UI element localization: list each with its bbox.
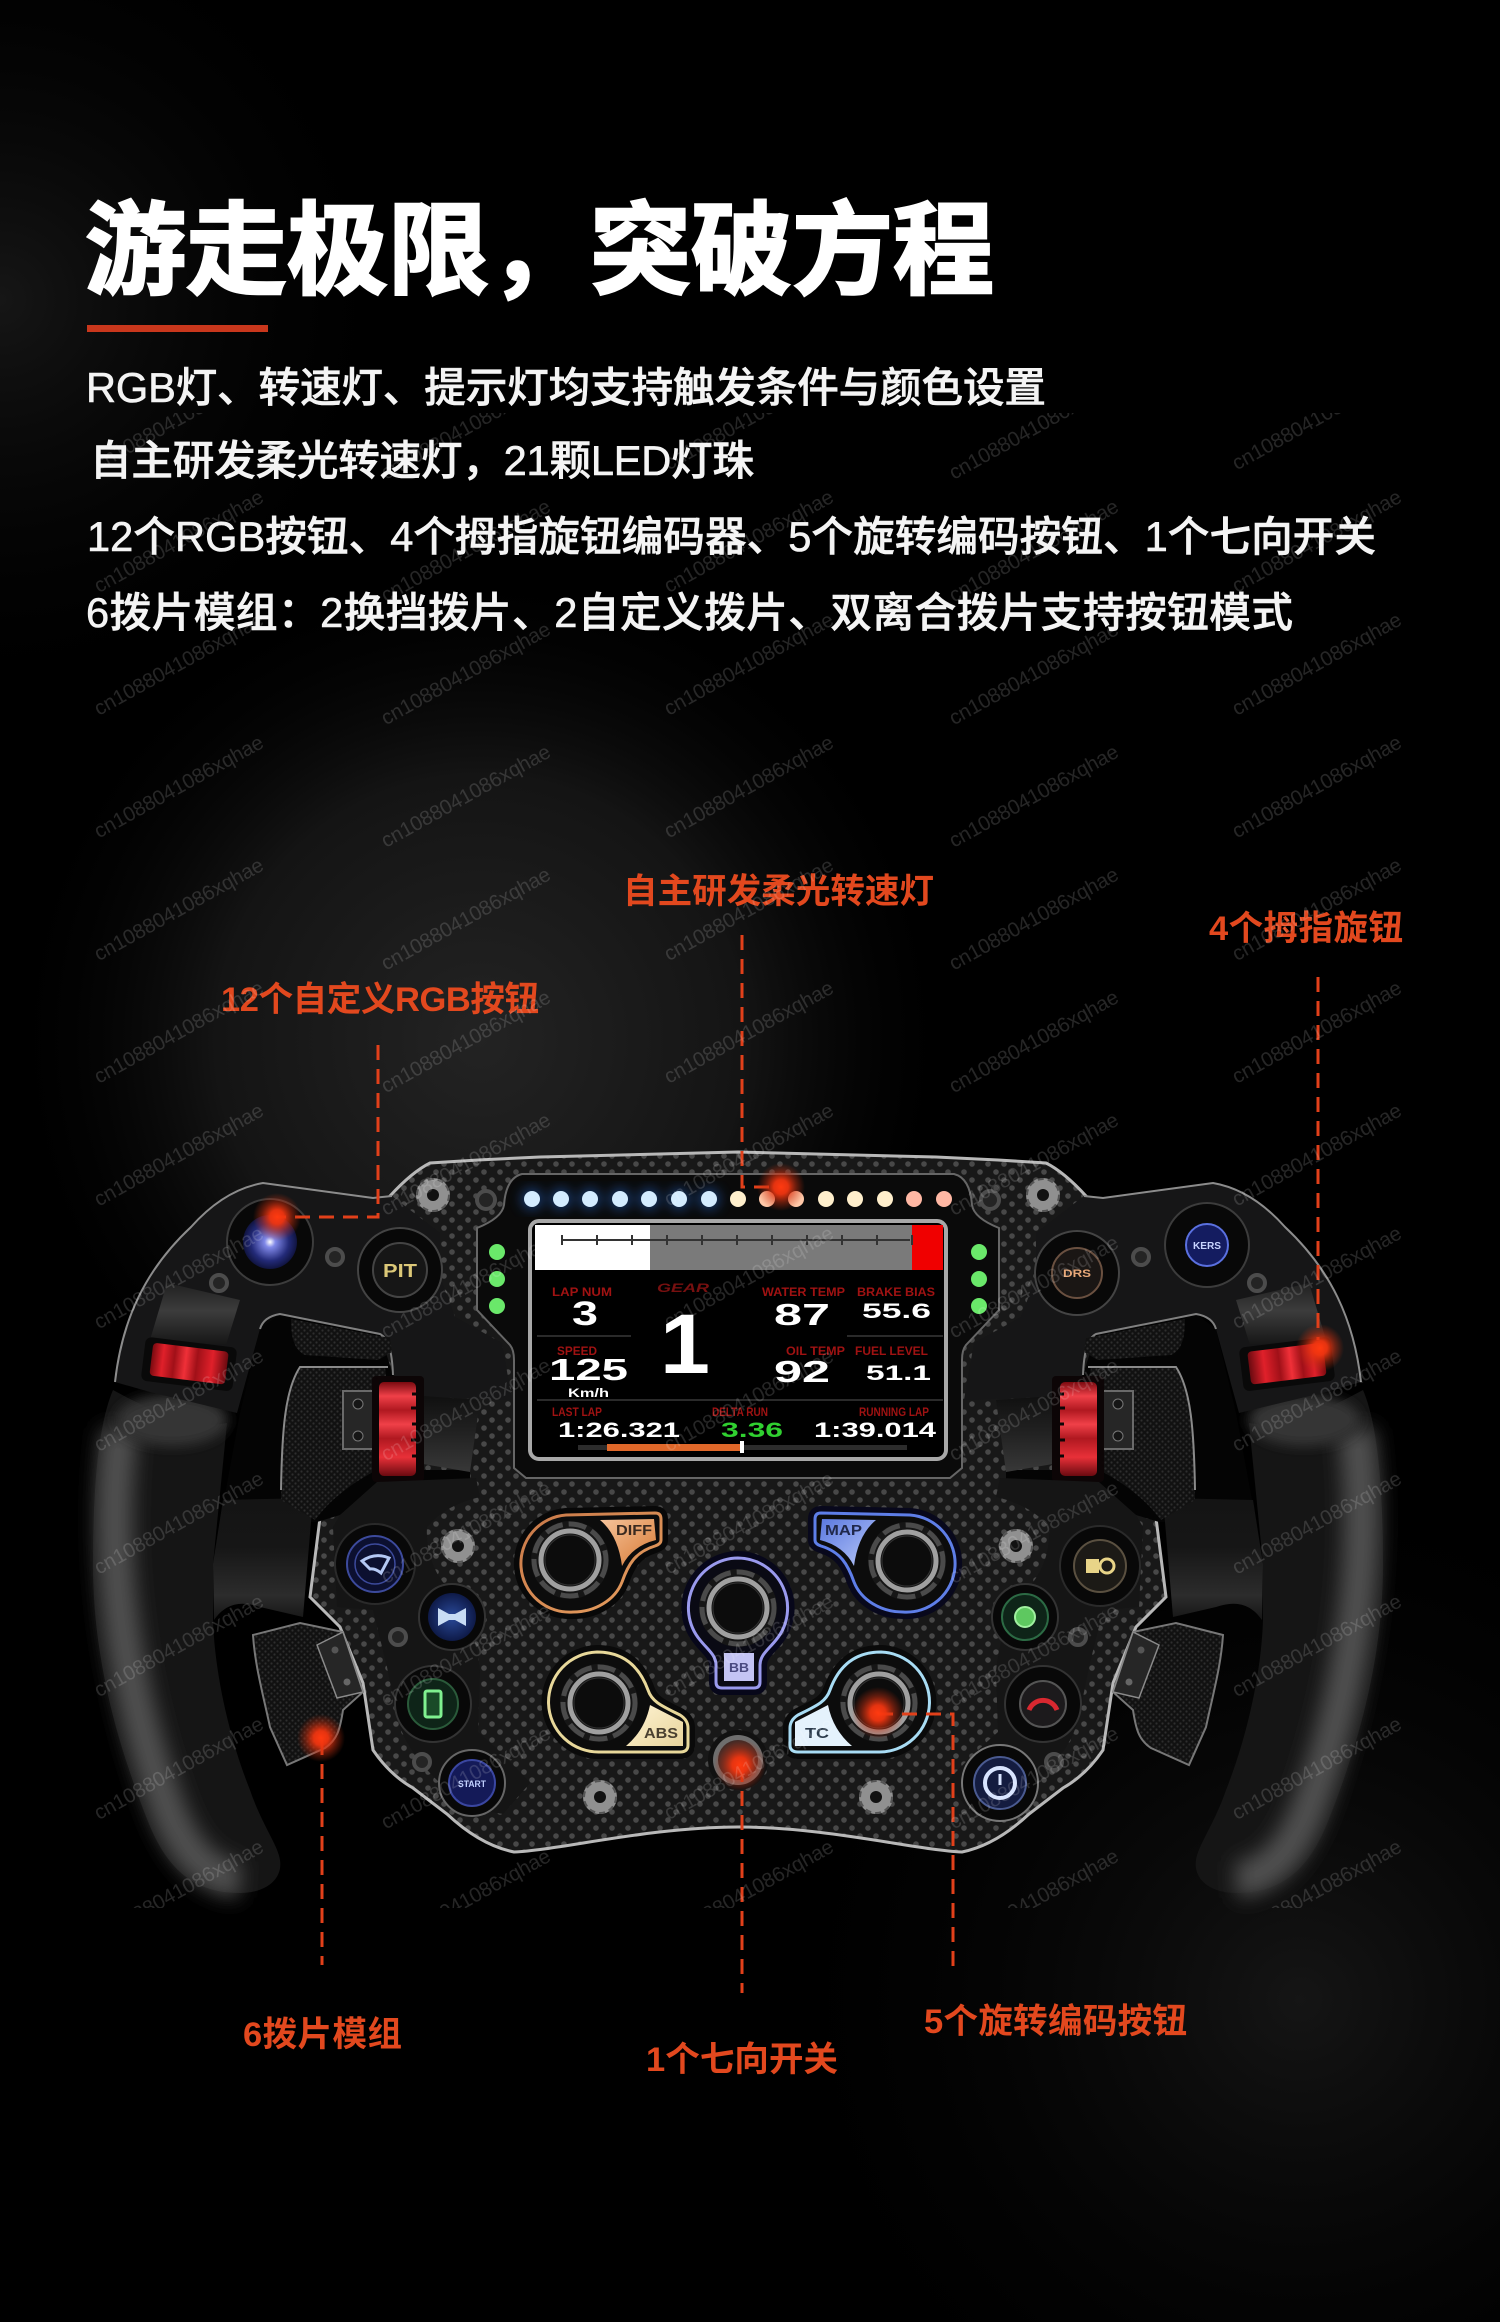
- watermarks: cn1088041086xqhae: [945, 372, 1123, 484]
- steering wheel: [93, 1152, 1383, 1893]
- watermarks: cn1088041086xqhae: [1228, 1590, 1406, 1702]
- delta bar: [578, 1445, 907, 1450]
- button: DRS: DRS: [1063, 1268, 1091, 1280]
- rotary encoder: BB: BB: [729, 1660, 749, 1675]
- watermarks: cn1088041086xqhae: [377, 495, 555, 607]
- button: PIT: [358, 1228, 442, 1312]
- watermarks: cn1088041086xqhae: [1228, 1712, 1406, 1825]
- watermarks: cn1088041086xqhae: [660, 485, 838, 598]
- watermarks: cn1088041086xqhae: [377, 986, 555, 1098]
- watermarks: cn1088041086xqhae: [377, 1108, 555, 1221]
- watermarks: cn1088041086xqhae: [377, 618, 555, 730]
- button: DRS: [1035, 1231, 1119, 1315]
- watermarks: cn1088041086xqhae: [377, 1231, 555, 1343]
- rotary encoder: MAP: [815, 1513, 955, 1612]
- watermarks: cn1088041086xqhae: [90, 1590, 268, 1702]
- side LEDs: [489, 1244, 987, 1314]
- display screen: 87: [774, 1297, 830, 1332]
- watermarks: cn1088041086xqhae: [90, 1344, 268, 1457]
- rotary encoder: DIFF: DIFF: [616, 1522, 652, 1539]
- right dark button bed: [946, 1478, 1143, 1814]
- callout: rev lights: [623, 873, 934, 1211]
- button: top-left RGB: [227, 1199, 313, 1285]
- watermarks: cn1088041086xqhae: [660, 853, 838, 966]
- display screen: 1: [660, 1297, 710, 1391]
- feature line 4: 6拨片模组：2换挡拨片、2自定义拨片、双离合拨片支持按钮模式: [86, 589, 1293, 636]
- rev LED row: [521, 1188, 952, 1210]
- watermarks: cn1088041086xqhae: [660, 1467, 838, 1579]
- watermarks: cn1088041086xqhae: [945, 1476, 1123, 1589]
- watermarks: cn1088041086xqhae: [1228, 731, 1406, 843]
- callout: 4 thumb wheels: [1209, 910, 1403, 1372]
- watermarks: cn1088041086xqhae: [945, 1231, 1123, 1343]
- brake bias: BRAKE BIAS: [857, 1285, 935, 1299]
- watermarks: cn1088041086xqhae: [377, 1354, 555, 1466]
- callout: 5 rotary encoders: [852, 1687, 1187, 2041]
- watermarks: cn1088041086xqhae: [90, 1099, 268, 1211]
- running lap: RUNNING LAP: [859, 1405, 929, 1419]
- screen dividers: [537, 1336, 943, 1400]
- watermarks: cn1088041086xqhae: [1228, 608, 1406, 720]
- watermarks: cn1088041086xqhae: [377, 1599, 555, 1711]
- watermarks: cn1088041086xqhae: [90, 485, 268, 598]
- watermarks: cn1088041086xqhae: [377, 1722, 555, 1834]
- delta: DELTA RUN: [712, 1405, 768, 1419]
- rotary encoder: ABS: ABS: [644, 1725, 678, 1742]
- rev bar: [535, 1225, 650, 1270]
- oil temp: OIL TEMP: [786, 1344, 845, 1358]
- watermarks: cn1088041086xqhae: [945, 495, 1123, 607]
- watermarks: cn1088041086xqhae: [660, 1712, 838, 1825]
- watermarks: cn1088041086xqhae: [90, 853, 268, 966]
- watermarks: cn1088041086xqhae: [660, 1590, 838, 1702]
- watermarks: [90, 363, 1406, 1957]
- speed: SPEED: [557, 1344, 597, 1358]
- water temp: WATER TEMP: [762, 1285, 845, 1299]
- left half: grip, wing, paddles, thumb wheels: [93, 1183, 512, 1893]
- watermarks: cn1088041086xqhae: [377, 372, 555, 484]
- lap number: LAP NUM: [552, 1285, 612, 1299]
- watermarks: cn1088041086xqhae: [1228, 853, 1406, 966]
- rotary encoder: DIFF: [521, 1513, 661, 1612]
- watermarks: cn1088041086xqhae: [90, 363, 268, 475]
- callout: 4 thumb wheels: 4个拇指旋钮: [1209, 910, 1403, 948]
- button: top-right blue: [1165, 1203, 1249, 1287]
- watermarks: cn1088041086xqhae: [945, 1722, 1123, 1834]
- rotary encoder: BB: [688, 1558, 788, 1688]
- watermarks: cn1088041086xqhae: [660, 731, 838, 843]
- button: START: START: [458, 1779, 486, 1789]
- watermarks: cn1088041086xqhae: [1228, 976, 1406, 1088]
- watermarks: cn1088041086xqhae: [945, 1108, 1123, 1221]
- dash panel: [477, 1174, 999, 1478]
- right half: grip, wing, paddles, thumb wheels: [964, 1183, 1383, 1893]
- left dark button bed: [333, 1478, 530, 1814]
- watermarks: cn1088041086xqhae: [90, 976, 268, 1088]
- callout: 6 paddles: [243, 1714, 402, 2054]
- button: stopwatch: [992, 1584, 1058, 1650]
- watermarks: cn1088041086xqhae: [1228, 1344, 1406, 1457]
- display screen: 3: [572, 1295, 598, 1333]
- watermarks: cn1088041086xqhae: [90, 731, 268, 843]
- rotary encoder: MAP: MAP: [825, 1522, 862, 1539]
- watermarks: cn1088041086xqhae: [377, 1476, 555, 1589]
- watermarks: cn1088041086xqhae: [660, 1344, 838, 1457]
- button: wiper: [335, 1524, 415, 1604]
- display screen: [530, 1221, 946, 1459]
- callout: seven-way switch: 1个七向开关: [646, 2041, 838, 2079]
- gear: GEAR: [657, 1281, 709, 1295]
- feature line 3: 12个RGB按钮、4个拇指旋钮编码器、5个旋转编码按钮、1个七向开关: [87, 513, 1376, 560]
- callout: 12 custom RGB buttons: [221, 981, 539, 1241]
- feature list: [86, 364, 1376, 636]
- watermarks: cn1088041086xqhae: [1228, 363, 1406, 475]
- button: high-low beam: [419, 1584, 485, 1650]
- rotary encoder: TC: [790, 1652, 929, 1752]
- button: battery: [395, 1666, 471, 1742]
- display screen: 3.36: [721, 1419, 783, 1442]
- watermarks: cn1088041086xqhae: [660, 1222, 838, 1334]
- button: gauge: [1005, 1666, 1081, 1742]
- watermarks: cn1088041086xqhae: [945, 1354, 1123, 1466]
- watermarks: cn1088041086xqhae: [377, 863, 555, 975]
- mounting screws: [416, 1178, 1060, 1814]
- watermarks: cn1088041086xqhae: [377, 1844, 555, 1957]
- watermarks: cn1088041086xqhae: [90, 608, 268, 720]
- small bolts: [211, 1191, 1265, 1770]
- callout: 12 custom RGB buttons: 12个自定义RGB按钮: [221, 981, 539, 1019]
- display screen: 92: [774, 1354, 830, 1389]
- watermarks: cn1088041086xqhae: [660, 608, 838, 720]
- watermarks: cn1088041086xqhae: [1228, 485, 1406, 598]
- last lap: LAST LAP: [552, 1405, 602, 1419]
- rotary encoder: ABS: [549, 1652, 688, 1752]
- button: top-right blue: KERS: [1193, 1241, 1221, 1252]
- button: START: [439, 1750, 505, 1816]
- watermarks: cn1088041086xqhae: [377, 740, 555, 852]
- rotary encoder: TC: TC: [805, 1725, 829, 1742]
- watermarks: cn1088041086xqhae: [945, 863, 1123, 975]
- callout: rev lights: 自主研发柔光转速灯: [623, 873, 934, 911]
- watermarks: cn1088041086xqhae: [90, 1835, 268, 1947]
- watermarks: cn1088041086xqhae: [1228, 1835, 1406, 1947]
- watermarks: cn1088041086xqhae: [660, 363, 838, 475]
- button: headlight: [1060, 1526, 1140, 1606]
- watermarks: cn1088041086xqhae: [660, 976, 838, 1088]
- watermarks: cn1088041086xqhae: [945, 740, 1123, 852]
- feature line 1: RGB灯、转速灯、提示灯均支持触发条件与颜色设置: [86, 364, 1046, 411]
- title: 游走极限，突破方程: [85, 196, 994, 308]
- watermarks: cn1088041086xqhae: [945, 986, 1123, 1098]
- fuel level: FUEL LEVEL: [855, 1344, 928, 1358]
- watermarks: cn1088041086xqhae: [945, 618, 1123, 730]
- display screen: 55.6: [862, 1300, 931, 1323]
- watermarks: cn1088041086xqhae: [945, 1844, 1123, 1957]
- display screen: 125: [549, 1352, 628, 1387]
- display screen: 1:26.321: [558, 1419, 680, 1442]
- watermarks: cn1088041086xqhae: [660, 1099, 838, 1211]
- display screen: 1:39.014: [814, 1419, 936, 1442]
- seven-way switch: [708, 1730, 768, 1790]
- button: PIT: PIT: [383, 1261, 417, 1281]
- button: power: [962, 1745, 1038, 1821]
- watermarks: cn1088041086xqhae: [945, 1599, 1123, 1711]
- watermarks: cn1088041086xqhae: [1228, 1099, 1406, 1211]
- carbon fibre faceplate: [310, 1152, 1166, 1852]
- callout: 5 rotary encoders: 5个旋转编码按钮: [924, 2003, 1187, 2041]
- watermarks: cn1088041086xqhae: [90, 1467, 268, 1579]
- feature line 2: 自主研发柔光转速灯，21颗LED灯珠: [90, 437, 754, 484]
- display screen: 51.1: [866, 1362, 932, 1385]
- title accent line: [87, 325, 268, 332]
- watermarks: cn1088041086xqhae: [1228, 1222, 1406, 1334]
- watermarks: cn1088041086xqhae: [90, 1712, 268, 1825]
- callout: seven-way switch: [646, 1739, 838, 2079]
- watermarks: cn1088041086xqhae: [660, 1835, 838, 1947]
- display screen: Km/h: [568, 1386, 609, 1400]
- watermarks: cn1088041086xqhae: [90, 1222, 268, 1334]
- watermarks: cn1088041086xqhae: [1228, 1467, 1406, 1579]
- callout: 6 paddles: 6拨片模组: [243, 2016, 402, 2054]
